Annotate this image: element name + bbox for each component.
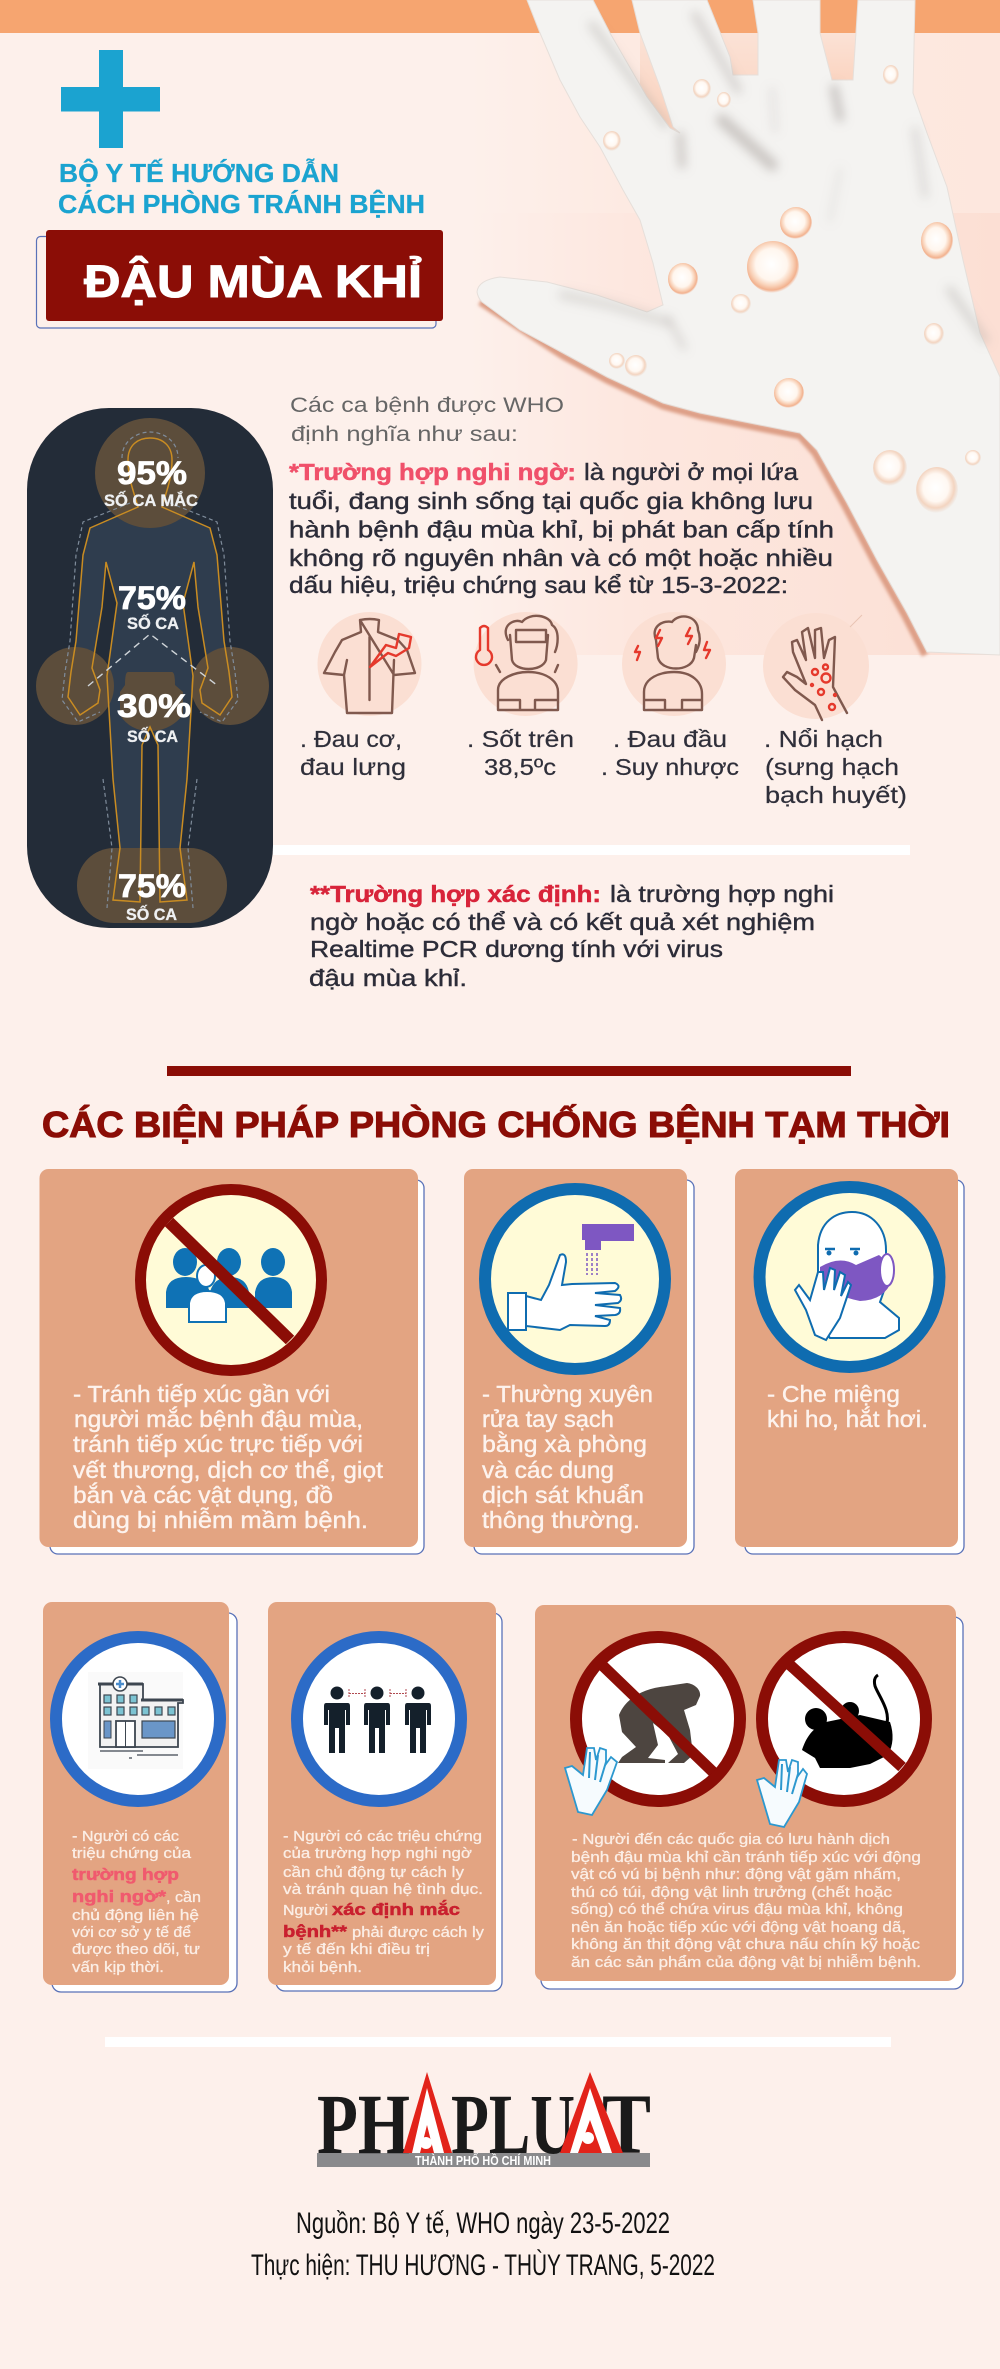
text: card 1: vết thương, dịch cơ thể, giọt [73,1457,384,1483]
text: card 4: chủ động liên hệ [72,1907,199,1924]
text: card 6: bệnh đậu mùa khỉ cần tránh tiếp xúc với động [571,1849,921,1866]
text: suspected case definition: *Trường hợp nghi ngờ: [289,459,576,485]
text: card 1: dùng bị nhiễm mầm bệnh. [73,1507,368,1533]
text: card 1: - Tránh tiếp xúc gần với [73,1381,330,1407]
text: card 5: khỏi bệnh. [283,1959,362,1976]
label: lymph nodes: bạch huyết) [765,782,907,808]
icon: no crowd [140,1190,322,1370]
stat: feet [118,868,186,924]
text: card 4: triệu chứng của [72,1845,192,1862]
text: card 5 [283,1828,485,1976]
stat: head: 95% [117,455,187,491]
stat: feet: 75% [118,868,186,904]
heading: prevention measures: CÁC BIỆN PHÁP PHÒNG CHỐNG BỆNH TẠM THỜI [42,1103,950,1145]
label: lymph nodes: . Nổi hạch [764,726,883,752]
text: suspected case definition: là người ở mọi lứa [584,459,798,485]
body outline [68,438,232,902]
text: card 4: trường hợp [72,1865,179,1884]
text: card 3: khi ho, hắt hơi. [767,1406,928,1432]
card: contact health facility [43,1602,237,1992]
icon: back pain [318,612,422,716]
dashed outer outline [62,432,238,908]
text: card 1: tránh tiếp xúc trực tiếp với [73,1431,363,1457]
icon: glove right [757,1760,807,1827]
text: card 5: của trường hợp nghi ngờ [283,1845,472,1862]
intro text: định nghĩa như sau: [291,423,518,446]
intro text [290,394,564,446]
logo: Pháp Luật: THÀNH PHỐ HỒ CHÍ MINH [415,2153,551,2168]
label: headache: . Suy nhược [601,754,739,780]
text: confirmed case definition: là trường hợp nghi [610,881,834,907]
icon: fever [474,612,578,716]
stat: groin [117,688,191,746]
text: card 6: sống) có thể chứa virus đậu mùa khỉ, không [571,1901,903,1918]
text: confirmed case definition: Realtime PCR dương tính với virus [310,936,723,962]
card: wash hands [464,1169,694,1554]
text: card 4: được theo dõi, tư [72,1941,200,1958]
label: fever [467,726,574,780]
card: avoid animals [535,1605,963,1989]
text: card 2: và các dung [482,1457,614,1483]
text: card 5: - Người có các triệu chứng [283,1828,482,1845]
text: suspected case definition: hành bệnh đậu mùa khỉ, bị phát ban cấp tính [289,516,834,542]
source and credits: Nguồn: Bộ Y tế, WHO ngày 23-5-2022 [296,2207,670,2240]
logo: Pháp Luật: PH [317,2076,410,2172]
card: self isolate [268,1602,502,1991]
card: cover mouth [735,1169,964,1554]
top band [0,0,1000,33]
text: card 5: xác định mắc [332,1900,460,1919]
label: muscle pain: đau lưng [300,754,406,780]
text: card 6: ăn các sản phẩm của động vật bị nhiễm bệnh. [571,1954,921,1971]
text: card 3: - Che miệng [767,1381,900,1407]
label: lymph nodes [764,726,907,808]
text: suspected case definition: không rõ nguyên nhân và có một hoặc nhiều [289,545,833,571]
text: card 1: người mắc bệnh đậu mùa, [74,1406,363,1432]
text: card 3 [767,1381,928,1432]
text: card 4: vấn kịp thời. [72,1959,164,1976]
text: card 4: nghi ngờ* [72,1887,166,1906]
text: suspected case definition: tuổi, đang sinh sống tại quốc gia không lưu [289,488,813,514]
icon: swollen lymph rash [763,613,869,720]
text: card 2: thông thường. [482,1507,640,1533]
icon: hospital [56,1637,220,1801]
label: lymph nodes: (sưng hạch [765,754,899,780]
label: muscle pain: . Đau cơ, [300,726,402,752]
source and credits [251,2207,715,2282]
text: card 2: dịch sát khuẩn [482,1482,644,1508]
text: card 5: và tránh quan hệ tình dục. [283,1881,483,1898]
text: card 6 [571,1831,921,1971]
title banner [36,230,443,328]
text: suspected case definition [289,459,834,598]
text: card 5: Người [283,1902,328,1919]
text: card 6: - Người đến các quốc gia có lưu hành dịch [572,1831,890,1848]
icon: glove left [565,1748,617,1815]
source and credits: Thực hiện: THU HƯƠNG - THÙY TRANG, 5-2022 [251,2249,715,2282]
dashed lymph lines [88,634,218,686]
text: card 5: phải được cách ly [352,1924,485,1941]
stat: groin: 30% [117,688,191,724]
text: card 4: với cơ sở y tế để [72,1924,191,1941]
stat: feet: SỐ CA [126,904,177,924]
text: card 4: - Người có các [72,1828,180,1845]
text: card 4 [72,1828,201,1976]
logo: Pháp Luật: T [602,2076,651,2172]
label: fever: 38,5ºc [484,754,556,780]
text: card 2: - Thường xuyên [482,1381,653,1407]
stat: head: SỐ CA MẮC [104,490,198,510]
text: confirmed case definition [309,881,834,991]
stat: head [104,455,198,510]
panel: body map [27,408,273,928]
title: ministry guidance: CÁCH PHÒNG TRÁNH BỆNH [58,189,425,219]
text: card 2: bằng xà phòng [482,1431,647,1457]
text: card 1 [73,1381,384,1533]
body silhouette [68,438,232,902]
text: confirmed case definition: **Trường hợp xác định: [310,881,601,907]
stat: groin: SỐ CA [127,726,178,746]
icon: no monkey [576,1637,740,1801]
text: card 6: không ăn thịt động vật chưa nấu chín kỹ hoặc [571,1936,921,1953]
icon: mask and cough [760,1187,940,1367]
icon: medical cross [61,50,160,148]
text: card 5: cần chủ động tự cách ly [283,1864,465,1881]
text: card 4: , cần [166,1889,201,1906]
text: card 2 [482,1381,653,1533]
label: muscle pain [300,726,406,780]
text: suspected case definition: dấu hiệu, triệu chứng sau kể từ 15-3-2022: [289,572,788,598]
title banner: ĐẬU MÙA KHỈ [84,256,422,307]
text: card 2: rửa tay sạch [482,1406,614,1432]
icon: headache [622,612,726,716]
text: card 6: thú có túi, động vật linh trưởng (chết hoặc [571,1884,893,1901]
photo: hand with blisters [477,0,1000,655]
affected area blobs [36,418,269,923]
logo: Pháp Luật: PLU [451,2076,575,2172]
text: card 6: vật có vú bị bệnh như: động vật gặm nhấm, [571,1866,901,1883]
stat: trunk: 75% [118,580,186,616]
backdrop behind hand [470,33,1000,655]
label: fever: . Sốt trên [467,726,574,752]
stat: trunk: SỐ CA [127,613,179,633]
card: avoid close contact [40,1169,424,1554]
text: card 5: bệnh** [283,1922,347,1941]
text: card 1: bắn và các vật dụng, đồ [73,1482,333,1508]
label: headache: . Đau đầu [613,726,727,752]
text: card 5: y tế đến khi điều trị [283,1941,430,1958]
intro text: Các ca bệnh được WHO [290,394,564,417]
stat: trunk [118,580,186,633]
icon: hand washing [485,1189,665,1369]
text: card 6: nên ăn hoặc tiếp xúc với động vật hoang dã, [571,1919,906,1936]
label: headache [601,726,739,780]
text: confirmed case definition: đậu mùa khỉ. [309,965,467,991]
title: ministry guidance [58,158,425,219]
icon: distancing people [297,1637,461,1801]
text: confirmed case definition: ngờ hoặc có thể và có kết quả xét nghiệm [310,909,815,935]
logo: Pháp Luật [317,2072,651,2172]
title: ministry guidance: BỘ Y TẾ HƯỚNG DẪN [59,158,339,188]
icon: no rodent [762,1637,926,1801]
